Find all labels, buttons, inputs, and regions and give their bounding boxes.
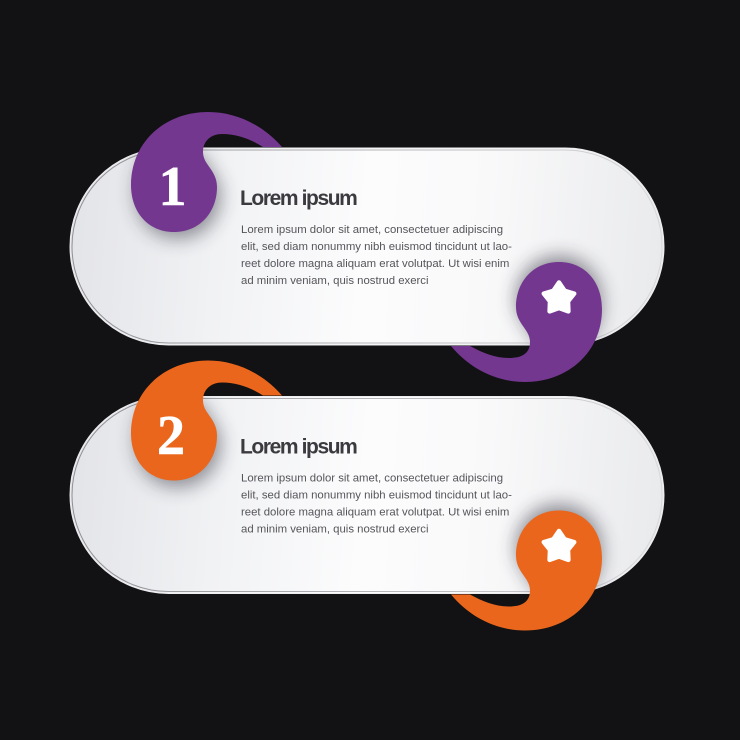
- icon: step 2 number swirl: [131, 360, 282, 480]
- card: step 1: [70, 148, 664, 345]
- panel: step 2: [70, 360, 664, 630]
- text block: step 2: reet dolore magna aliquam erat volutpat. Ut wisi enim: [241, 506, 509, 518]
- text block: step 2: ad minim veniam, quis nostrud exerci: [241, 524, 429, 536]
- text block: step 1: elit, sed diam nonummy nibh euismod tincidunt ut lao-: [241, 241, 512, 253]
- icon: step 1 star swirl: [451, 262, 602, 382]
- heading: step 1: Lorem ipsum: [240, 187, 357, 210]
- heading: step 2: Lorem ipsum: [240, 436, 357, 458]
- text block: step 1: Lorem ipsum dolor sit amet, consectetuer adipiscing: [241, 224, 503, 236]
- text block: step 2: Lorem ipsum dolor sit amet, consectetuer adipiscing: [241, 472, 503, 484]
- text block: step 2: elit, sed diam nonummy nibh euismod tincidunt ut lao-: [241, 490, 512, 502]
- text block: step 1: ad minim veniam, quis nostrud exerci: [241, 275, 429, 287]
- panel: step 1: [70, 112, 664, 382]
- text block: step 1: reet dolore magna aliquam erat volutpat. Ut wisi enim: [241, 258, 509, 270]
- icon: step 1 star: [544, 282, 574, 311]
- icon: step 2 star: [544, 531, 574, 560]
- number 1: 1: [158, 156, 186, 218]
- icon: step 2 star swirl: [451, 510, 602, 630]
- icon: step 1 number swirl: [131, 112, 282, 232]
- number 2: 2: [157, 405, 185, 467]
- card: step 2: [70, 396, 664, 594]
